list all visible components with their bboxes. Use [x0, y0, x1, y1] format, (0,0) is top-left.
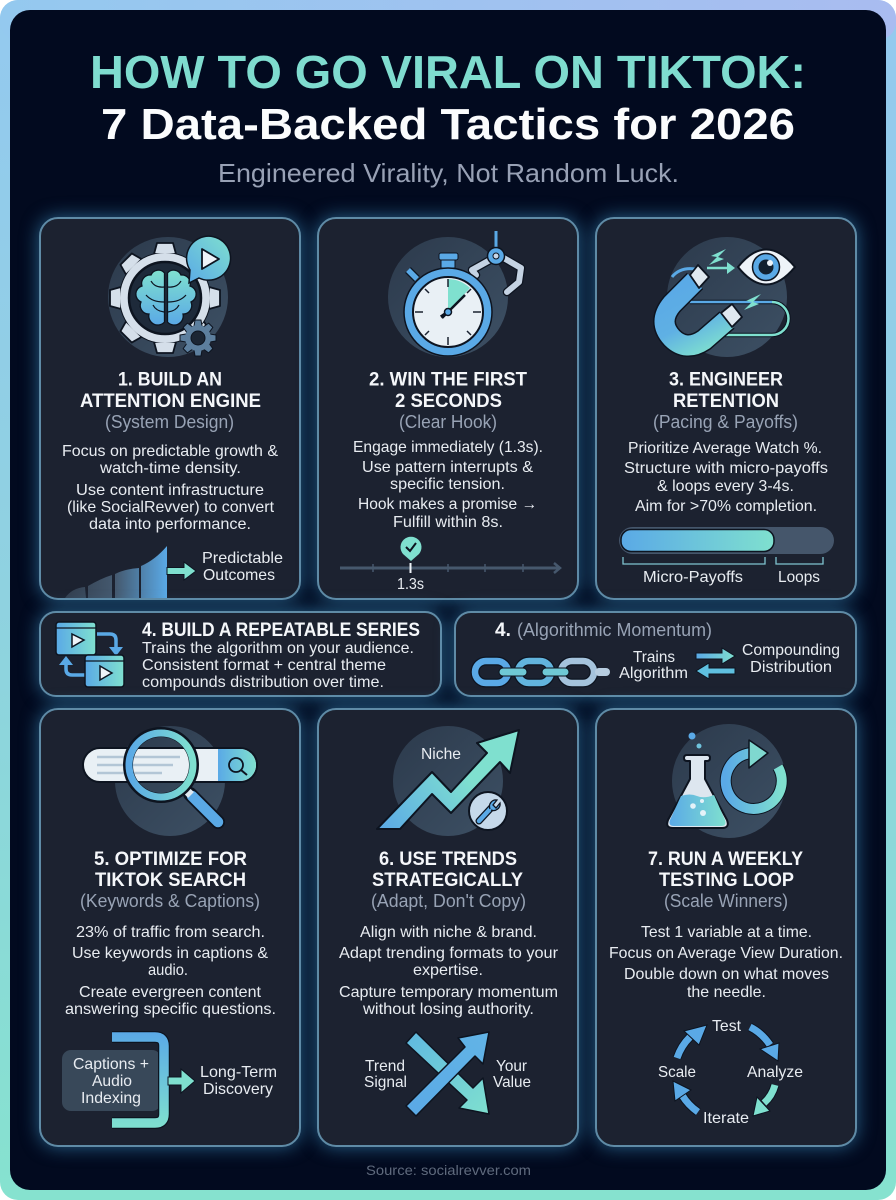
diagram: test, analyze, iterate, scale loop: Iterate	[703, 1110, 749, 1127]
icon: flask with circular arrow	[667, 724, 786, 838]
diagram: trend signal crossing your value: Value	[493, 1074, 531, 1091]
icon: magnet, eye and loop	[664, 237, 795, 357]
body text: Hook makes a promise →	[358, 496, 537, 513]
chart: rising bars to predictable outcomes: Outcomes	[203, 567, 275, 584]
subheading: (System Design)	[105, 412, 234, 432]
subheading: (Adapt, Don't Copy)	[371, 891, 526, 911]
heading: 2. WIN THE FIRST	[369, 370, 527, 390]
heading: 7. RUN A WEEKLY	[648, 849, 803, 870]
label: compounding distribution: Compounding	[742, 642, 840, 659]
label: trains algorithm: Algorithm	[619, 665, 688, 682]
icon: chain links	[475, 661, 610, 683]
body text: Capture temporary momentum	[339, 984, 558, 1001]
icon: rising trend arrow with wrench	[377, 726, 519, 836]
icon: rising trend arrow with wrench: Niche	[421, 746, 461, 763]
panel: tactic 2	[318, 218, 578, 599]
label: trains algorithm: Trains	[633, 649, 675, 666]
heading	[648, 849, 803, 891]
progress bar: micro-payoffs and loops	[619, 527, 834, 586]
subtitle: Engineered Virality, Not Random Luck.	[218, 158, 679, 188]
panel: tactic 5	[40, 709, 300, 1146]
heading	[369, 370, 527, 412]
diagram: trend signal crossing your value: Trend	[365, 1058, 405, 1075]
panel: tactic 6	[318, 709, 578, 1146]
title: HOW TO GO VIRAL ON TIKTOK:	[90, 46, 806, 98]
timeline: 1.3s marker: 1.3s	[397, 576, 424, 593]
diagram: trend signal crossing your value	[364, 1032, 531, 1116]
label: trains algorithm	[619, 649, 688, 682]
body text: Use pattern interrupts &	[362, 459, 533, 476]
diagram: captions and audio indexing to discovery	[62, 1037, 277, 1123]
heading: (Algorithmic Momentum)	[517, 620, 712, 640]
source footer: Source: socialrevver.com	[366, 1162, 531, 1178]
diagram: captions and audio indexing to discovery: Audio	[92, 1073, 132, 1090]
body text: Aim for >70% completion.	[635, 498, 817, 515]
chart: rising bars to predictable outcomes	[65, 546, 283, 598]
heading: 5. OPTIMIZE FOR	[94, 849, 247, 870]
icon: stopwatch with claw	[388, 231, 521, 357]
body text	[142, 640, 414, 691]
body text: Trains the algorithm on your audience.	[142, 640, 414, 657]
body text: Test 1 variable at a time.	[641, 924, 812, 941]
diagram: test, analyze, iterate, scale loop: Scale	[658, 1064, 696, 1081]
body text: Create evergreen content	[79, 984, 262, 1001]
title: 7 Data-Backed Tactics for 2026	[101, 100, 795, 149]
body text: Prioritize Average Watch %.	[628, 440, 822, 457]
icon: video windows loop	[56, 622, 124, 687]
subheading: (Pacing & Payoffs)	[653, 412, 798, 432]
heading: 1. BUILD AN	[118, 370, 222, 390]
body text: Engage immediately (1.3s).	[353, 439, 543, 456]
body text: Fulfill within 8s.	[393, 514, 503, 531]
diagram: captions and audio indexing to discovery: Captions +	[73, 1056, 149, 1073]
heading	[80, 370, 261, 412]
progress bar: micro-payoffs and loops: Micro-Payoffs	[643, 569, 743, 586]
body text: without losing authority.	[362, 1001, 534, 1018]
body text	[65, 924, 276, 1018]
body text	[609, 924, 843, 1001]
heading	[669, 370, 783, 412]
heading: 4. BUILD A REPEATABLE SERIES	[142, 620, 420, 641]
body text	[353, 439, 543, 531]
body text	[339, 924, 559, 1018]
heading: 3. ENGINEER	[669, 370, 783, 390]
diagram: captions and audio indexing to discovery: Long-Term	[200, 1064, 277, 1081]
diagram: test, analyze, iterate, scale loop	[658, 1018, 803, 1127]
body text: answering specific questions.	[65, 1001, 276, 1018]
panel: tactic 1	[40, 218, 300, 599]
panel: tactic 3	[596, 218, 856, 599]
timeline: 1.3s marker	[338, 537, 560, 593]
heading: ATTENTION ENGINE	[80, 391, 261, 412]
heading: STRATEGICALLY	[372, 870, 523, 891]
panel: algorithmic momentum	[455, 612, 856, 696]
body text: Consistent format + central theme	[142, 657, 386, 674]
diagram: test, analyze, iterate, scale loop: Analyze	[747, 1064, 803, 1081]
body text: Use content infrastructure	[76, 482, 264, 499]
heading: TIKTOK SEARCH	[95, 870, 246, 891]
body text: expertise.	[413, 962, 483, 979]
label: compounding distribution: Distribution	[750, 659, 832, 676]
body text: (like SocialRevver) to convert	[67, 499, 275, 516]
body text: 23% of traffic from search.	[76, 924, 265, 941]
diagram: captions and audio indexing to discovery: Discovery	[203, 1081, 273, 1098]
subheading: (Clear Hook)	[399, 412, 497, 432]
body text	[624, 440, 828, 515]
body text: & loops every 3-4s.	[657, 478, 794, 495]
body text: watch-time density.	[99, 460, 241, 477]
heading	[94, 849, 247, 891]
body text: Adapt trending formats to your	[339, 945, 559, 962]
body text: Focus on Average View Duration.	[609, 945, 843, 962]
progress bar: micro-payoffs and loops: Loops	[778, 569, 820, 586]
body text: Align with niche & brand.	[360, 924, 537, 941]
body text: data into performance.	[89, 516, 251, 533]
heading: TESTING LOOP	[659, 870, 794, 891]
body text	[62, 443, 278, 533]
heading: RETENTION	[673, 391, 779, 412]
chart: rising bars to predictable outcomes: Predictable	[202, 550, 283, 567]
panel: tactic 7	[596, 709, 856, 1146]
body text: Use keywords in captions &	[72, 945, 268, 962]
body text: the needle.	[687, 984, 766, 1001]
heading	[372, 849, 523, 891]
subheading: (Keywords & Captions)	[80, 891, 260, 911]
title	[90, 46, 806, 149]
icon: magnifier over search bar	[83, 726, 257, 836]
subheading: (Scale Winners)	[664, 891, 788, 911]
diagram: captions and audio indexing to discovery: Indexing	[81, 1090, 141, 1107]
heading: 4.	[495, 620, 511, 641]
body text: Double down on what moves	[624, 966, 829, 983]
body text: compounds distribution over time.	[142, 674, 384, 691]
body text: Focus on predictable growth &	[62, 443, 278, 460]
arrows: two-way exchange	[696, 648, 735, 679]
heading: 2 SECONDS	[395, 391, 502, 412]
heading: 6. USE TRENDS	[379, 849, 517, 870]
diagram: trend signal crossing your value: Signal	[364, 1074, 407, 1091]
label: compounding distribution	[742, 642, 840, 676]
icon: brain gear with play bubble	[108, 236, 231, 357]
body text: audio.	[148, 962, 188, 979]
diagram: test, analyze, iterate, scale loop: Test	[712, 1018, 742, 1035]
body text: specific tension.	[390, 476, 505, 493]
body text: Structure with micro-payoffs	[624, 460, 828, 477]
panel: tactic 4 repeatable series	[40, 612, 441, 696]
diagram: trend signal crossing your value: Your	[496, 1058, 528, 1075]
